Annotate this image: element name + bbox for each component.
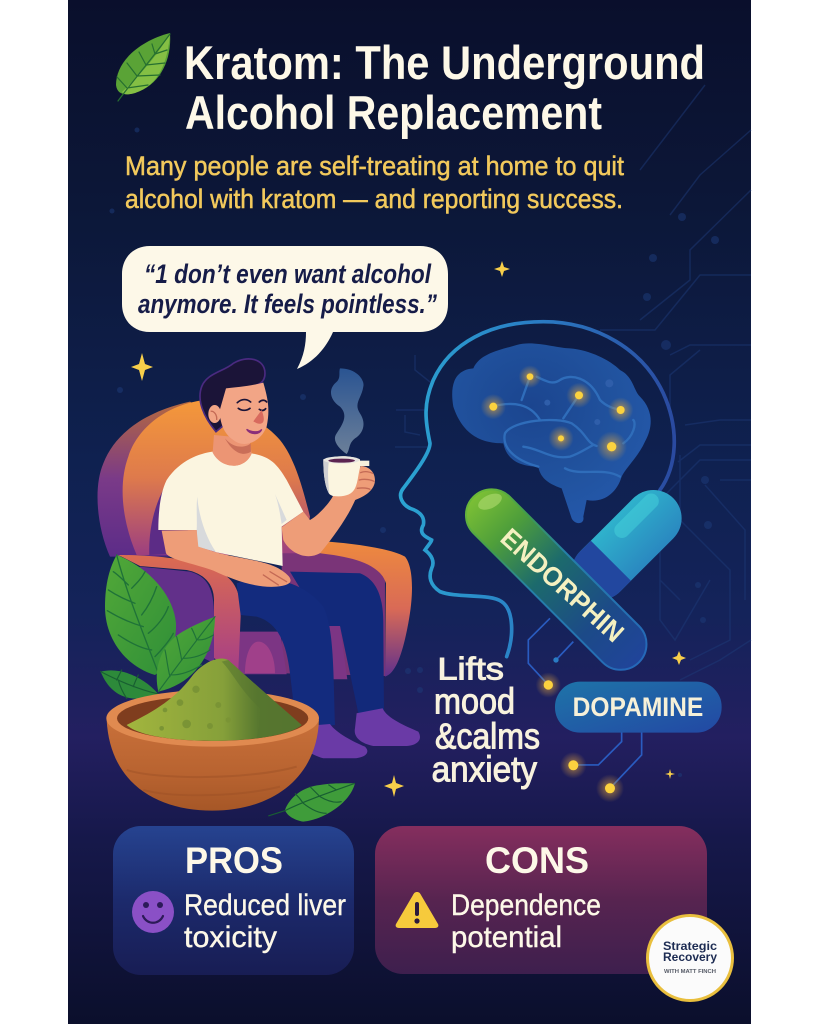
badge: strategic recovery logo: Recovery	[663, 952, 718, 964]
capsule: dopamine: DOPAMINE	[573, 692, 703, 722]
badge: strategic recovery logo: Strategic	[663, 941, 718, 953]
panel: cons: potential	[451, 921, 562, 954]
capsule: dopamine	[555, 682, 722, 733]
title: Kratom: The Underground	[184, 36, 705, 89]
label: lifts mood and calms anxiety: Lifts	[437, 650, 504, 686]
brain	[452, 343, 651, 523]
white t-shirt	[158, 452, 303, 566]
coffee cup with steam and hand	[323, 368, 375, 502]
icon: smiley	[132, 891, 174, 933]
illustration: man relaxing in armchair with coffee	[98, 359, 420, 758]
speech bubble quote: “1 don’t even want alcohol	[144, 259, 432, 289]
dopamine circuit traces	[528, 618, 642, 788]
speech bubble quote	[122, 246, 448, 369]
icon: warning triangle	[396, 892, 438, 928]
subtitle	[125, 151, 625, 214]
label: lifts mood and calms anxiety	[432, 650, 540, 790]
panel: pros: Reduced liver	[184, 889, 346, 922]
glowing brain nodes	[481, 365, 633, 462]
label: lifts mood and calms anxiety: mood	[434, 680, 515, 721]
speech bubble quote: anymore. It feels pointless.”	[138, 289, 438, 319]
subtitle: Many people are self-treating at home to quit	[125, 151, 625, 181]
panel: cons	[375, 826, 707, 974]
panel: cons: CONS	[485, 840, 589, 881]
head profile outline	[401, 322, 674, 657]
label: lifts mood and calms anxiety: &calms	[435, 715, 540, 756]
panel: cons: Dependence	[451, 889, 601, 922]
panel: pros: toxicity	[184, 921, 277, 954]
subtitle: alcohol with kratom — and reporting success.	[125, 184, 623, 214]
arms	[162, 494, 357, 587]
title	[184, 36, 705, 139]
legs and socks	[237, 572, 420, 758]
badge: strategic recovery logo	[648, 916, 732, 1000]
panel: pros	[113, 826, 354, 975]
badge: strategic recovery logo: WITH MATT FINCH	[664, 969, 716, 975]
kratom leaves	[101, 555, 215, 699]
glowing circuit nodes	[536, 657, 624, 802]
neck and head	[200, 359, 268, 466]
icon: header leaf	[116, 33, 170, 101]
illustration: kratom leaves and powder bowl	[101, 555, 355, 822]
wooden bowl and green powder	[106, 659, 319, 811]
capsule: blue	[560, 478, 693, 611]
panel: pros: PROS	[185, 840, 283, 881]
illustration: head, brain and neurotransmitter capsules	[401, 322, 722, 802]
capsule: endorphin: ENDORPHIN	[495, 522, 630, 648]
label: lifts mood and calms anxiety: anxiety	[432, 749, 537, 790]
fallen leaf	[268, 783, 355, 822]
armchair	[98, 401, 412, 677]
title: Alcohol Replacement	[185, 86, 602, 139]
circuit board background pattern	[395, 85, 751, 680]
sparkle stars	[131, 261, 686, 797]
capsule: endorphin	[455, 479, 657, 680]
